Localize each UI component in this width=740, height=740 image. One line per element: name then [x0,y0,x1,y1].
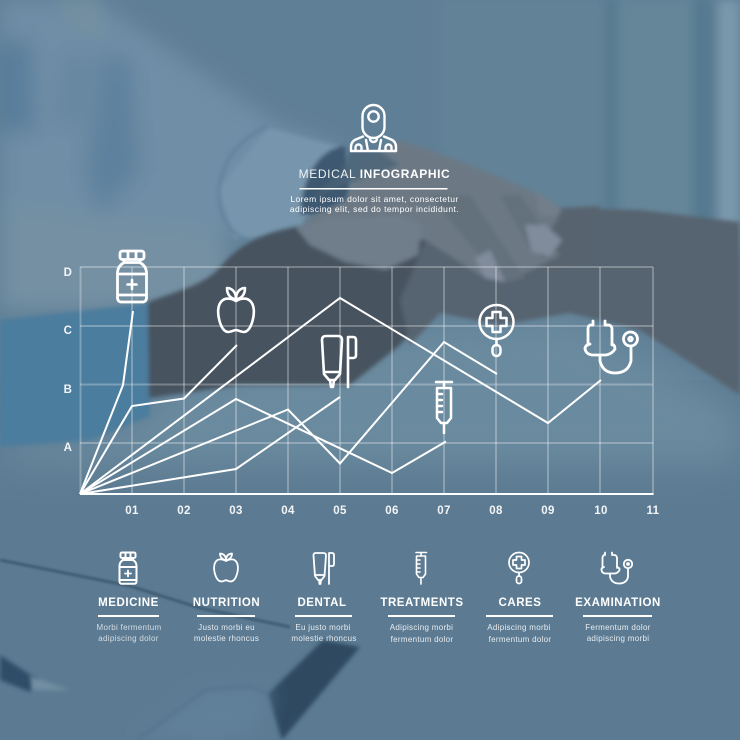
column: cares [486,552,553,644]
x axis labels: 07 [437,505,451,517]
line: nutrition [80,345,237,494]
description: treatments: fermentum dolor [391,635,453,644]
y axis labels [64,267,72,454]
chart icon: medicine bottle [118,251,146,302]
x axis labels: 10 [594,505,608,517]
x axis labels: 05 [333,505,347,517]
y axis labels: C [64,325,72,337]
line chart [64,267,660,517]
column: treatments [380,552,464,644]
line: medicine [80,311,133,494]
x axis labels [125,505,660,517]
chart icon: cares magnifier with cross [480,305,514,356]
description: cares: Adipiscing morbi [487,623,551,632]
header icon: doctor [351,105,396,151]
chart grid [80,267,653,494]
description: medicine [97,623,162,643]
icon: cares magnifier with cross [509,552,529,584]
x axis [80,493,654,495]
description: nutrition: Justo morbi eu [198,623,255,632]
column: nutrition [193,554,260,643]
description: medicine: adipiscing dolor [98,634,159,643]
line: dental [80,397,340,494]
x axis labels: 11 [647,505,660,517]
thumb [296,216,422,270]
right arm [400,208,740,395]
column: dental [291,553,357,643]
header description: Lorem ipsum dolor sit amet, consectetur [290,194,459,204]
description: dental [291,623,357,643]
y axis labels: B [64,384,72,396]
cuff [218,126,352,240]
header description [290,194,459,214]
description: nutrition [194,623,259,643]
wall and curtain [440,0,740,250]
heading: medicine: MEDICINE [98,597,159,609]
chart icon: syringe [436,382,452,433]
heading: treatments: TREATMENTS [380,597,464,609]
y axis labels: A [64,442,72,454]
description: treatments [390,623,453,644]
x axis labels: 02 [177,505,191,517]
upper hand and fingers [300,140,562,282]
description: examination [585,623,651,643]
heading: dental: DENTAL [297,597,347,609]
heading: examination: EXAMINATION [575,597,661,609]
description: nutrition: molestie rhoncus [194,634,259,643]
description: treatments: Adipiscing morbi [390,623,453,632]
x axis labels: 08 [489,505,503,517]
chart icon: dental tube and brush [322,336,356,387]
description: examination: adipiscing morbi [587,634,649,643]
icon: apple [214,554,238,582]
header description: adipiscing elit, sed do tempor incididunt. [290,204,459,214]
x axis labels: 09 [541,505,555,517]
lower hand and cuff [0,140,740,447]
icon: stethoscope [601,552,632,584]
column: medicine [97,552,162,643]
icon: syringe [416,552,426,584]
chart icon: apple [218,288,254,332]
table [0,380,740,740]
column: examination [575,552,661,643]
description: dental: Eu justo morbi [295,623,351,632]
icon: medicine bottle [120,552,136,584]
x axis labels: 03 [229,505,243,517]
description: dental: molestie rhoncus [291,634,357,643]
chart icon: stethoscope [585,321,638,373]
line: examination [80,298,601,494]
line: treatments [80,399,446,494]
x axis labels: 01 [125,505,139,517]
heading: nutrition: NUTRITION [193,597,260,609]
icon: dental tube and brush [314,553,334,584]
chart lines [80,298,601,494]
heading: cares: CARES [498,597,542,609]
x axis labels: 06 [385,505,399,517]
title: MEDICAL INFOGRAPHIC [299,167,450,181]
left shirt and table [0,0,345,310]
description: medicine: Morbi fermentum [97,623,162,632]
description: cares [487,623,551,644]
y axis labels: D [64,267,72,279]
x axis labels: 04 [281,505,295,517]
line: cares [80,342,497,494]
description: examination: Fermentum dolor [585,623,651,632]
description: cares: fermentum dolor [489,635,551,644]
pen lines [0,560,290,627]
